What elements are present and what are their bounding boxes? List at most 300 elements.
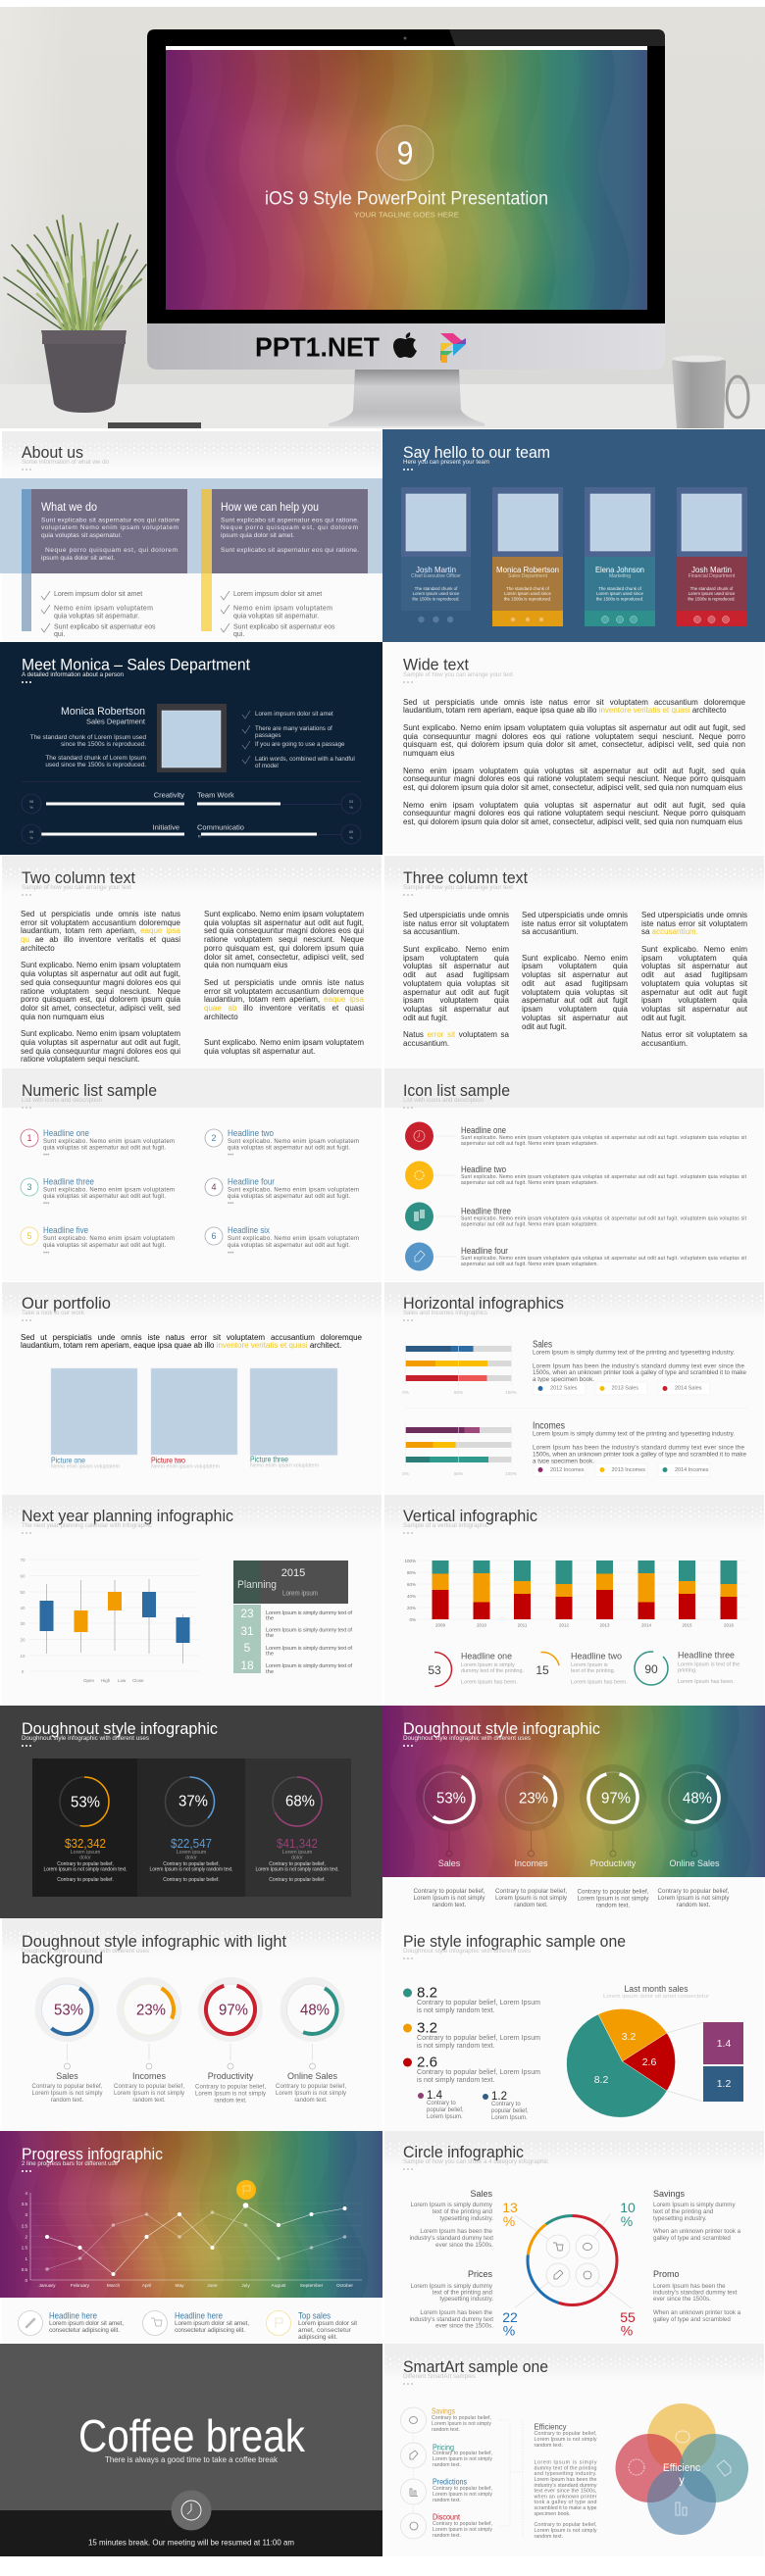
icon item: headline four [405,1243,747,1270]
item: pricing: Pricing [433,2443,454,2452]
card: how we can help you: How we can help you [221,502,319,514]
block: prices: Lorem Ipsum has been the [420,2309,493,2315]
panel: icon list [384,1068,764,1281]
list item 5: Sunt explicabo. Nemo enim ipsam voluptatem [43,1236,175,1242]
block: sales: 13 [502,2200,518,2215]
chart: pie [567,1984,743,2117]
dots [403,1745,413,1747]
text: sales: Sales [533,1339,552,1351]
text column: efficiency: when an unknown printer [534,2494,597,2500]
text: incomes [533,1421,746,1464]
subheading: List with icons and description [403,1098,484,1104]
checklist: qui. [233,631,244,637]
icon: clock [171,2490,212,2531]
stat: 2.6: 2.6 [417,2055,437,2070]
list item 1: ••• [43,1153,49,1159]
picture three: Nemo enim ipsam voluptatem [250,1462,320,1468]
dots [22,2170,31,2172]
icon item: headline two [405,1161,747,1190]
checklist: Lorem impsum dolor sit amet [233,590,322,598]
card: what we do: quia voluptas sit aspernatur. [41,531,122,539]
gauge: 53: Lorem Ipsum is simply [461,1662,515,1668]
item: pricing: Lorem Ipsum is not simply [433,2456,492,2462]
feature: cart: Headline here [175,2311,223,2321]
dots [22,681,31,683]
text: sales: Lorem Ipsum has been the industry's standard dummy text ever since the [533,1362,744,1369]
text column: efficiency: random text. [534,2443,563,2449]
calendar block: 5 [244,1641,251,1655]
doughnut: sales: Lorem Ipsum is not simply [31,2091,102,2097]
feature: cart [143,2311,249,2335]
calendar block: 2015 [281,1567,305,1579]
dots [403,681,413,683]
subheading: Doughnout style infographic with different uses [403,1736,531,1742]
stat: 8.2: Contrary to popular belief, Lorem Ipsum [417,2000,540,2006]
item: pricing: Contrary to popular belief, [433,2451,492,2456]
chart: candlestick: 60 [20,1573,26,1578]
chart: stacked columns: 2010 [477,1622,487,1627]
block: savings: Lorem Ipsum is simply dummy [653,2202,736,2207]
captions: Lorem Ipsum is not simply [657,1894,730,1902]
block: sales: % [503,2213,515,2229]
chart: line chart: 1 [25,2256,27,2260]
icon item: headline four: aspernatur aut odit aut fugit. Nemo enim ipsam voluptatem. [461,1262,598,1267]
body text: Nemo enim ipsam voluptatem quia voluptas sit aspernatur aut odit aut fugit, sed quia consequuntur magni dolores eos qui ratione voluptatem sequi nesciunt. Neque porro quisquam est, qui dolorem ipsum quia dolor sit amet, consectetur, adipisci velit, sed quia non numquam eius [403,800,745,826]
stat: 1.2: 1.2 [491,2091,507,2103]
calendar block: the [266,1633,274,1639]
chart: candlestick: 30 [20,1621,26,1625]
feature: cart: Lorem ipsum dolor sit amet, [175,2319,249,2327]
profile text: The standard chunk of Lorem Ipsum used [30,733,146,741]
heading: Meet Monica – Sales Department [22,657,250,674]
heading: Doughnout style infographic [22,1720,218,1738]
chart: candlestick: 0 [22,1668,25,1674]
block: prices: % [503,2323,515,2339]
list item 3: quia voluptas sit aspernatur aut odit aut fugit. [43,1194,166,1200]
checklist: Lorem impsum dolor sit amet [54,590,142,598]
card: how we can help you: Sunt explicabo sit aspernatur eos qui ratione. [221,547,359,553]
list item 4: Headline four [228,1176,275,1186]
gauge: 15: 15 [536,1663,549,1677]
doughnut: sales: random text. [51,2098,84,2104]
skill: initiative: 99 [29,829,34,833]
doughnut: productivity: Contrary to popular belief, [195,2084,266,2090]
text column: efficiency: took a galley of type and [534,2500,597,2505]
chart: line chart: July [241,2282,250,2288]
calendar block: Lorem ipsum [282,1590,318,1598]
column: 37%: $22,547 [171,1837,212,1851]
subheading: A detailed information about a person [22,672,124,678]
team card: Josh Martin, finance: The standard chunk of [690,586,734,590]
dots [403,1957,413,1959]
chart: candlestick: 70 [20,1557,26,1562]
icon item: headline two: Sunt explicabo. Nemo enim ipsam voluptatem quia voluptas sit aspernatur aut odit aut fugit. voluptatem quia voluptas sit [461,1174,747,1180]
text column: efficiency [534,2423,597,2540]
team card: Josh Martin: Lorem Ipsum used since [413,591,460,596]
text column: efficiency: random text. [534,2534,563,2540]
slide title: iOS 9 Style PowerPoint Presentation [265,188,548,210]
chart: candlestick: 50 [20,1590,26,1594]
list item 4: ••• [228,1202,233,1208]
team card: Josh Martin: Chief Executive Officer [411,573,461,579]
icon item: headline three: aspernatur aut odit aut fugit. Nemo enim ipsam voluptatem. [461,1221,598,1227]
feature: flag: Lorem ipsum dolor sit [298,2319,357,2327]
dots [22,1107,31,1109]
legend: sales: 2013 Sales [612,1386,638,1392]
column: 53%: dolor [79,1855,91,1860]
legend: incomes: 2013 Incomes [612,1467,645,1473]
skill: communication: Communicatio [197,823,244,831]
column: 68%: $41,342 [277,1837,318,1851]
captions: Contrary to popular belief, [577,1888,649,1895]
item: discount: Lorem Ipsum is not simply [433,2527,492,2533]
team card: Elena Johnson: the 1500s is reproduced. [596,596,643,601]
block: promo: 55 [620,2309,636,2325]
chart: venn diagram [616,2403,748,2535]
chart: pie: Last month sales [624,1984,688,1994]
chart: line chart: 4 [25,2190,27,2196]
doughnut: incomes [497,1764,565,1868]
item: savings: Lorem Ipsum is not simply [432,2421,491,2427]
chart: candlestick: Close [132,1678,144,1682]
column: 68%: Lorem Ipsum is not simply random text. [255,1866,339,1872]
text column: efficiency: Lorem Ipsum is not simply [534,2528,597,2534]
block: sales: ever since the 1500s. [435,2241,493,2249]
text: incomes: a type specimen book. [533,1458,594,1464]
chart: venn diagram: Efficienc [663,2462,700,2474]
chart: segmented ring [515,2214,632,2308]
photo frame [157,704,227,772]
chart: venn diagram: y [679,2474,685,2486]
doughnut: productivity: 97% [601,1790,631,1808]
left column: Sunt explicabo. Nemo enim ipsam voluptatem quia voluptas sit aspernatur aut odit aut fugit, sed quia consequuntur magni dolores eos qui ratione voluptatem sequi nesciunt. [21,1029,180,1064]
block: promo: Lorem Ipsum has been the [653,2282,726,2290]
chart: stacked columns: 80% [407,1570,416,1574]
chart: candlestick: 10 [20,1653,26,1659]
doughnut: sales: 53% [54,2002,83,2019]
block: promo: galley of type and scrambled [653,2315,731,2323]
block: prices: Prices [468,2269,492,2279]
card: what we do: ipsum quia dolor sit amet. [41,555,115,561]
captions: random text. [514,1902,548,1907]
chart: candlestick: High [101,1678,111,1682]
text column: efficiency: Lorem Ipsum is not simply [534,2437,597,2443]
column three: Natus error sit voluptatem sa accusantium. [641,1030,747,1048]
chart: line chart: 2 [25,2234,27,2239]
calendar block: the [266,1615,274,1621]
stat: 2.6: Contrary to popular belief, Lorem Ipsum [417,2068,540,2076]
chart: incomes bars: 50% [454,1470,463,1476]
skill: team work: Team Work [197,790,234,800]
checklist: of model [255,763,279,768]
text column: efficiency: Contrary to popular belief, [534,2431,596,2437]
heading: Numeric list sample [22,1082,157,1100]
subheading: Different SmartArt samples [403,2374,476,2380]
column: 37%: dolor [185,1855,197,1860]
captions: random text. [677,1902,710,1907]
chart: stacked columns: 2009 [435,1622,446,1627]
icon item: headline one [405,1121,747,1151]
picture two: Picture two [151,1457,185,1464]
column three [641,912,747,1059]
block: sales: Lorem Ipsum is simply dummy [410,2202,493,2207]
doughnut: productivity [195,1977,266,2104]
calendar block: Lorem Ipsum is simply dummy text of [266,1646,352,1652]
team card: Monica Robertson: Monica Robertson [496,565,559,574]
chart: line chart: 1.5 [22,2245,27,2250]
block: sales [410,2189,518,2249]
gauge: 90: Lorem Ipsum has been. [678,1679,735,1685]
block: savings: typesetting industry. [653,2215,707,2221]
subheading: Doughnout style infographic with different uses [403,1949,531,1955]
checklist: Lorem impsum dolor sit amet [255,710,333,718]
item: savings: Contrary to popular belief, [432,2415,491,2421]
list item 2: Headline two [228,1128,274,1138]
chart: stacked columns: 0% [409,1617,416,1621]
doughnut: online sales [661,1764,728,1868]
doughnut: sales [31,1976,103,2104]
hero: desktop monitor photo [0,7,765,428]
skill: communication: n [198,833,201,839]
chart: incomes bars: 0% [402,1470,409,1476]
chart: candlestick: 40 [20,1606,26,1610]
icon: coffee mug [672,355,748,428]
stat: 3.2: Contrary to popular belief, Lorem Ipsum [417,2035,540,2041]
checklist [221,590,335,637]
card: what we do: What we do [41,502,97,514]
right column [204,911,364,1067]
icon item: headline three [405,1202,747,1231]
stat: 3.2: 3.2 [417,2019,437,2037]
team card: Josh Martin, finance: Financial Department [688,573,736,579]
doughnut: online sales: Lorem Ipsum is not simply [276,2091,346,2097]
stat: 1.2: Contrary to [491,2102,521,2107]
card: what we do [22,489,187,637]
legend: sales: 2012 Sales [550,1386,578,1392]
subheading: Take a look to our work [22,1311,85,1316]
subheading: Sample of a vertical infographic [403,1523,488,1529]
gauge: 53: Headline one [461,1651,512,1660]
dots [22,1319,31,1321]
chart: line chart: February [71,2282,90,2288]
block: savings: % [621,2213,633,2229]
panel: pie infographic [384,1918,764,2131]
heading: Two column text [22,869,135,887]
heading: About us [22,444,83,462]
doughnut: incomes: Incomes [514,1858,548,1868]
chart: incomes bars [402,1422,517,1476]
skill: initiative: % [29,835,33,839]
team card: Monica Robertson [492,487,563,626]
panel: next year planning [2,1495,382,1706]
heading: Doughnout style infographic with light [22,1933,286,1951]
gauge: 90: Headline three [678,1651,735,1660]
stat: 8.2: 8.2 [417,1984,437,2002]
panel: numeric list [2,1068,382,1281]
icon item: headline three: Sunt explicabo. Nemo enim ipsam voluptatem quia voluptas sit aspernatur aut odit aut fugit. voluptatem quia voluptas sit [461,1215,747,1221]
stat: 1.2: Lorem Ipsum. [491,2115,528,2121]
monitor stand [329,370,484,426]
checklist: quia voluptas sit aspernatur. [233,613,319,619]
icon item: headline one: Sunt explicabo. Nemo enim ipsam voluptatem quia voluptas sit aspernatur aut odit aut fugit. voluptatem quia voluptas sit [461,1135,747,1141]
chart: candlestick: 20 [20,1637,26,1642]
chart: line chart: 2.5 [22,2223,27,2228]
heading: Vertical infographic [403,1508,537,1525]
list item 6: Headline six [228,1225,270,1235]
block: savings: When an unknown printer took a [653,2227,741,2235]
captions: Lorem Ipsum is not simply [577,1895,649,1902]
team card: Elena Johnson: Elena Johnson [595,565,644,574]
column: 37%: 37% [178,1794,208,1809]
text: incomes: 1500s, when an unknown printer took a galley of type and scrambled it to make [533,1451,746,1458]
list item 2 [205,1128,359,1159]
calendar block: Planning [237,1579,277,1591]
legend: sales: 2014 Sales [675,1386,702,1392]
subheading: Sample of how you can show a 4 category infographic [403,2159,548,2165]
column one: Natus error sit voluptatem sa accusantium. [403,1030,509,1048]
column: 37%: Contrary to popular belief. [163,1877,220,1883]
skill: creativity: 98 [29,798,34,804]
column: 53%: Lorem Ipsum is not simply random text. [43,1866,128,1872]
checklist: Sunt explicabo sit aspernatur eos [233,623,335,630]
chart: line chart: October [336,2282,353,2288]
panel: meet Monica [0,642,382,855]
chart: stacked columns: 20% [407,1606,416,1610]
doughnut: incomes: random text. [132,2098,166,2104]
list item 1: quia voluptas sit aspernatur aut odit aut fugit. [43,1145,166,1151]
body text: Nemo enim ipsam voluptatem quia voluptas sit aspernatur aut odit aut fugit, sed quia consequuntur magni dolores eos qui ratione voluptatem sequi nesciunt. Neque porro quisquam est, qui dolorem ipsum quia dolor sit amet, consectetur, adipisci velit, sed quia non numquam eius [403,767,745,792]
doughnut: incomes: Contrary to popular belief, [114,2084,184,2090]
item: savings: random text. [432,2427,460,2433]
chart: stacked columns: 2013 [599,1622,610,1627]
chart: stacked columns: 2016 [724,1622,735,1627]
text column: efficiency: and typesetting industry. [534,2471,596,2477]
team card: Josh Martin: Josh Martin [416,565,456,574]
subheading: Sales and Incomes infographics [403,1311,487,1316]
block: savings: 10 [620,2200,636,2215]
list item 2: 2 [211,1133,217,1143]
stat: 2.6 [403,2055,540,2084]
card: what we do: Sunt explicabo sit aspernatur eos qui ratione [41,517,179,523]
heading: background [22,1950,103,1967]
doughnut: incomes: Incomes [132,2071,167,2081]
skill: communication: % [349,835,353,839]
chart: line chart: May [175,2282,184,2288]
captions: Contrary to popular belief, [414,1888,485,1894]
panel: circle infographic [384,2131,764,2344]
list item 1: Sunt explicabo. Nemo enim ipsam voluptatem [43,1139,175,1145]
heading: SmartArt sample one [403,2358,548,2376]
feature: link: Lorem ipsum dolor sit amet, [49,2319,124,2327]
chart: line chart: 0 [25,2278,27,2282]
legend: sales [534,1382,710,1395]
panel: about us [0,431,382,642]
doughnut: online sales: Contrary to popular belief, [276,2084,346,2090]
block: sales: industry's standard dummy text [410,2235,493,2241]
gauge: 15: Headline two [571,1651,622,1660]
calendar block: the [266,1669,274,1675]
team card: Josh Martin, finance: Lorem Ipsum used since [688,591,736,596]
legend: incomes: 2012 Incomes [550,1467,585,1473]
chart: pie: 8.2 [594,2074,608,2086]
card: how we can help you: Sunt explicabo sit aspernatur eos qui ratione. [221,517,359,523]
calendar block: the [266,1651,274,1657]
skill: team work: 53 [349,798,354,804]
chart: line chart: March [107,2282,120,2288]
block: prices [410,2269,518,2339]
icon: flag marker [236,2180,256,2200]
doughnut: incomes: 23% [519,1790,548,1808]
heading: Our portfolio [22,1295,111,1313]
heading: Say hello to our team [403,444,550,462]
item: predictions [400,2478,492,2504]
column: 53%: $32,342 [65,1837,106,1851]
stat: 3.2 [403,2019,540,2049]
body text: Sunt explicabo. Nemo enim ipsam voluptatem quia voluptas sit aspernatur aut odit aut fugit, sed quia consequuntur magni dolores eos qui ratione voluptatem sequi nesciunt. Neque porro quisquam est, qui dolorem ipsum quia dolor sit amet, consectetur, adipisci velit, sed quia non numquam eius [403,723,745,758]
doughnut: productivity: random text. [214,2098,247,2104]
doughnut: sales: Sales [438,1858,461,1868]
doughnut: online sales [276,1976,346,2104]
list item 3: Headline three [43,1176,94,1186]
chart: stacked columns: 40% [407,1594,416,1598]
big heading: Coffee break [78,2410,306,2461]
list item 4: 4 [211,1182,217,1192]
left column [21,911,180,1067]
stat: 1.4: popular belief, [427,2107,464,2113]
list item 3 [21,1176,175,1208]
team card: Josh Martin: The standard chunk of [415,586,458,590]
doughnut: online sales: random text. [294,2098,328,2104]
column: 37%: Contrary to popular belief, [163,1861,220,1867]
gauge: 15: Lorem Ipsum is [571,1662,608,1668]
list item 6 [205,1225,359,1257]
stat: 8.2 [403,1984,540,2013]
skill: initiative: Initiative [152,823,179,831]
chart: line chart: 0.5 [22,2266,27,2272]
legend: incomes [534,1463,710,1476]
icon: apple logo [393,332,417,358]
brand text: PPT1.NET [255,331,380,363]
gauge: 53 [418,1651,524,1686]
list item 6: ••• [228,1251,233,1257]
team card: Josh Martin [401,487,471,622]
gauge: 53: Lorem Ipsum has been. [461,1680,518,1686]
doughnut: incomes [114,1976,184,2104]
item: pricing [400,2443,492,2468]
column: 37%: Lorem ipsum [177,1850,207,1856]
chart: incomes bars: 100% [505,1470,517,1476]
chart: line chart: September [300,2282,324,2288]
dots [22,1745,31,1747]
doughnut: online sales: 48% [300,2002,330,2019]
list item 2: Sunt explicabo. Nemo enim ipsam voluptatem [228,1139,359,1145]
block: savings: text of the printing and [653,2207,714,2215]
block: promo: industry's standard dummy text [653,2289,738,2296]
text: incomes: Lorem Ipsum has been the industry's standard dummy text ever since the [533,1444,744,1451]
list item 1: Headline one [43,1128,89,1138]
skill: creativity [22,790,184,814]
stat: 2.6: is not simply random text. [417,2076,494,2084]
card: what we do: Neque porro quisquam est, qui dolorem [45,547,178,553]
item: predictions: Contrary to popular belief, [433,2486,492,2492]
text column: efficiency: text ever since the 1500s, [534,2488,596,2494]
item: discount: Discount [433,2513,461,2521]
block: promo: Promo [653,2269,680,2279]
subheading: Some information of what we do [22,460,110,466]
text: sales: Lorem Ipsum is simply dummy text of the printing and typesetting industry. [533,1349,735,1357]
item: predictions: Lorem Ipsum is not simply [433,2492,492,2498]
column one: Sunt explicabo. Nemo enim ipsam voluptatem quia voluptas sit aspernatur aut odit aut asad fugitipsam voluptatem quia voluptas sit aspernatur aut odit aut fugit ipsam voluptatem quia voluptas sit aspernatur aut odit aut fugit. [403,945,509,1022]
